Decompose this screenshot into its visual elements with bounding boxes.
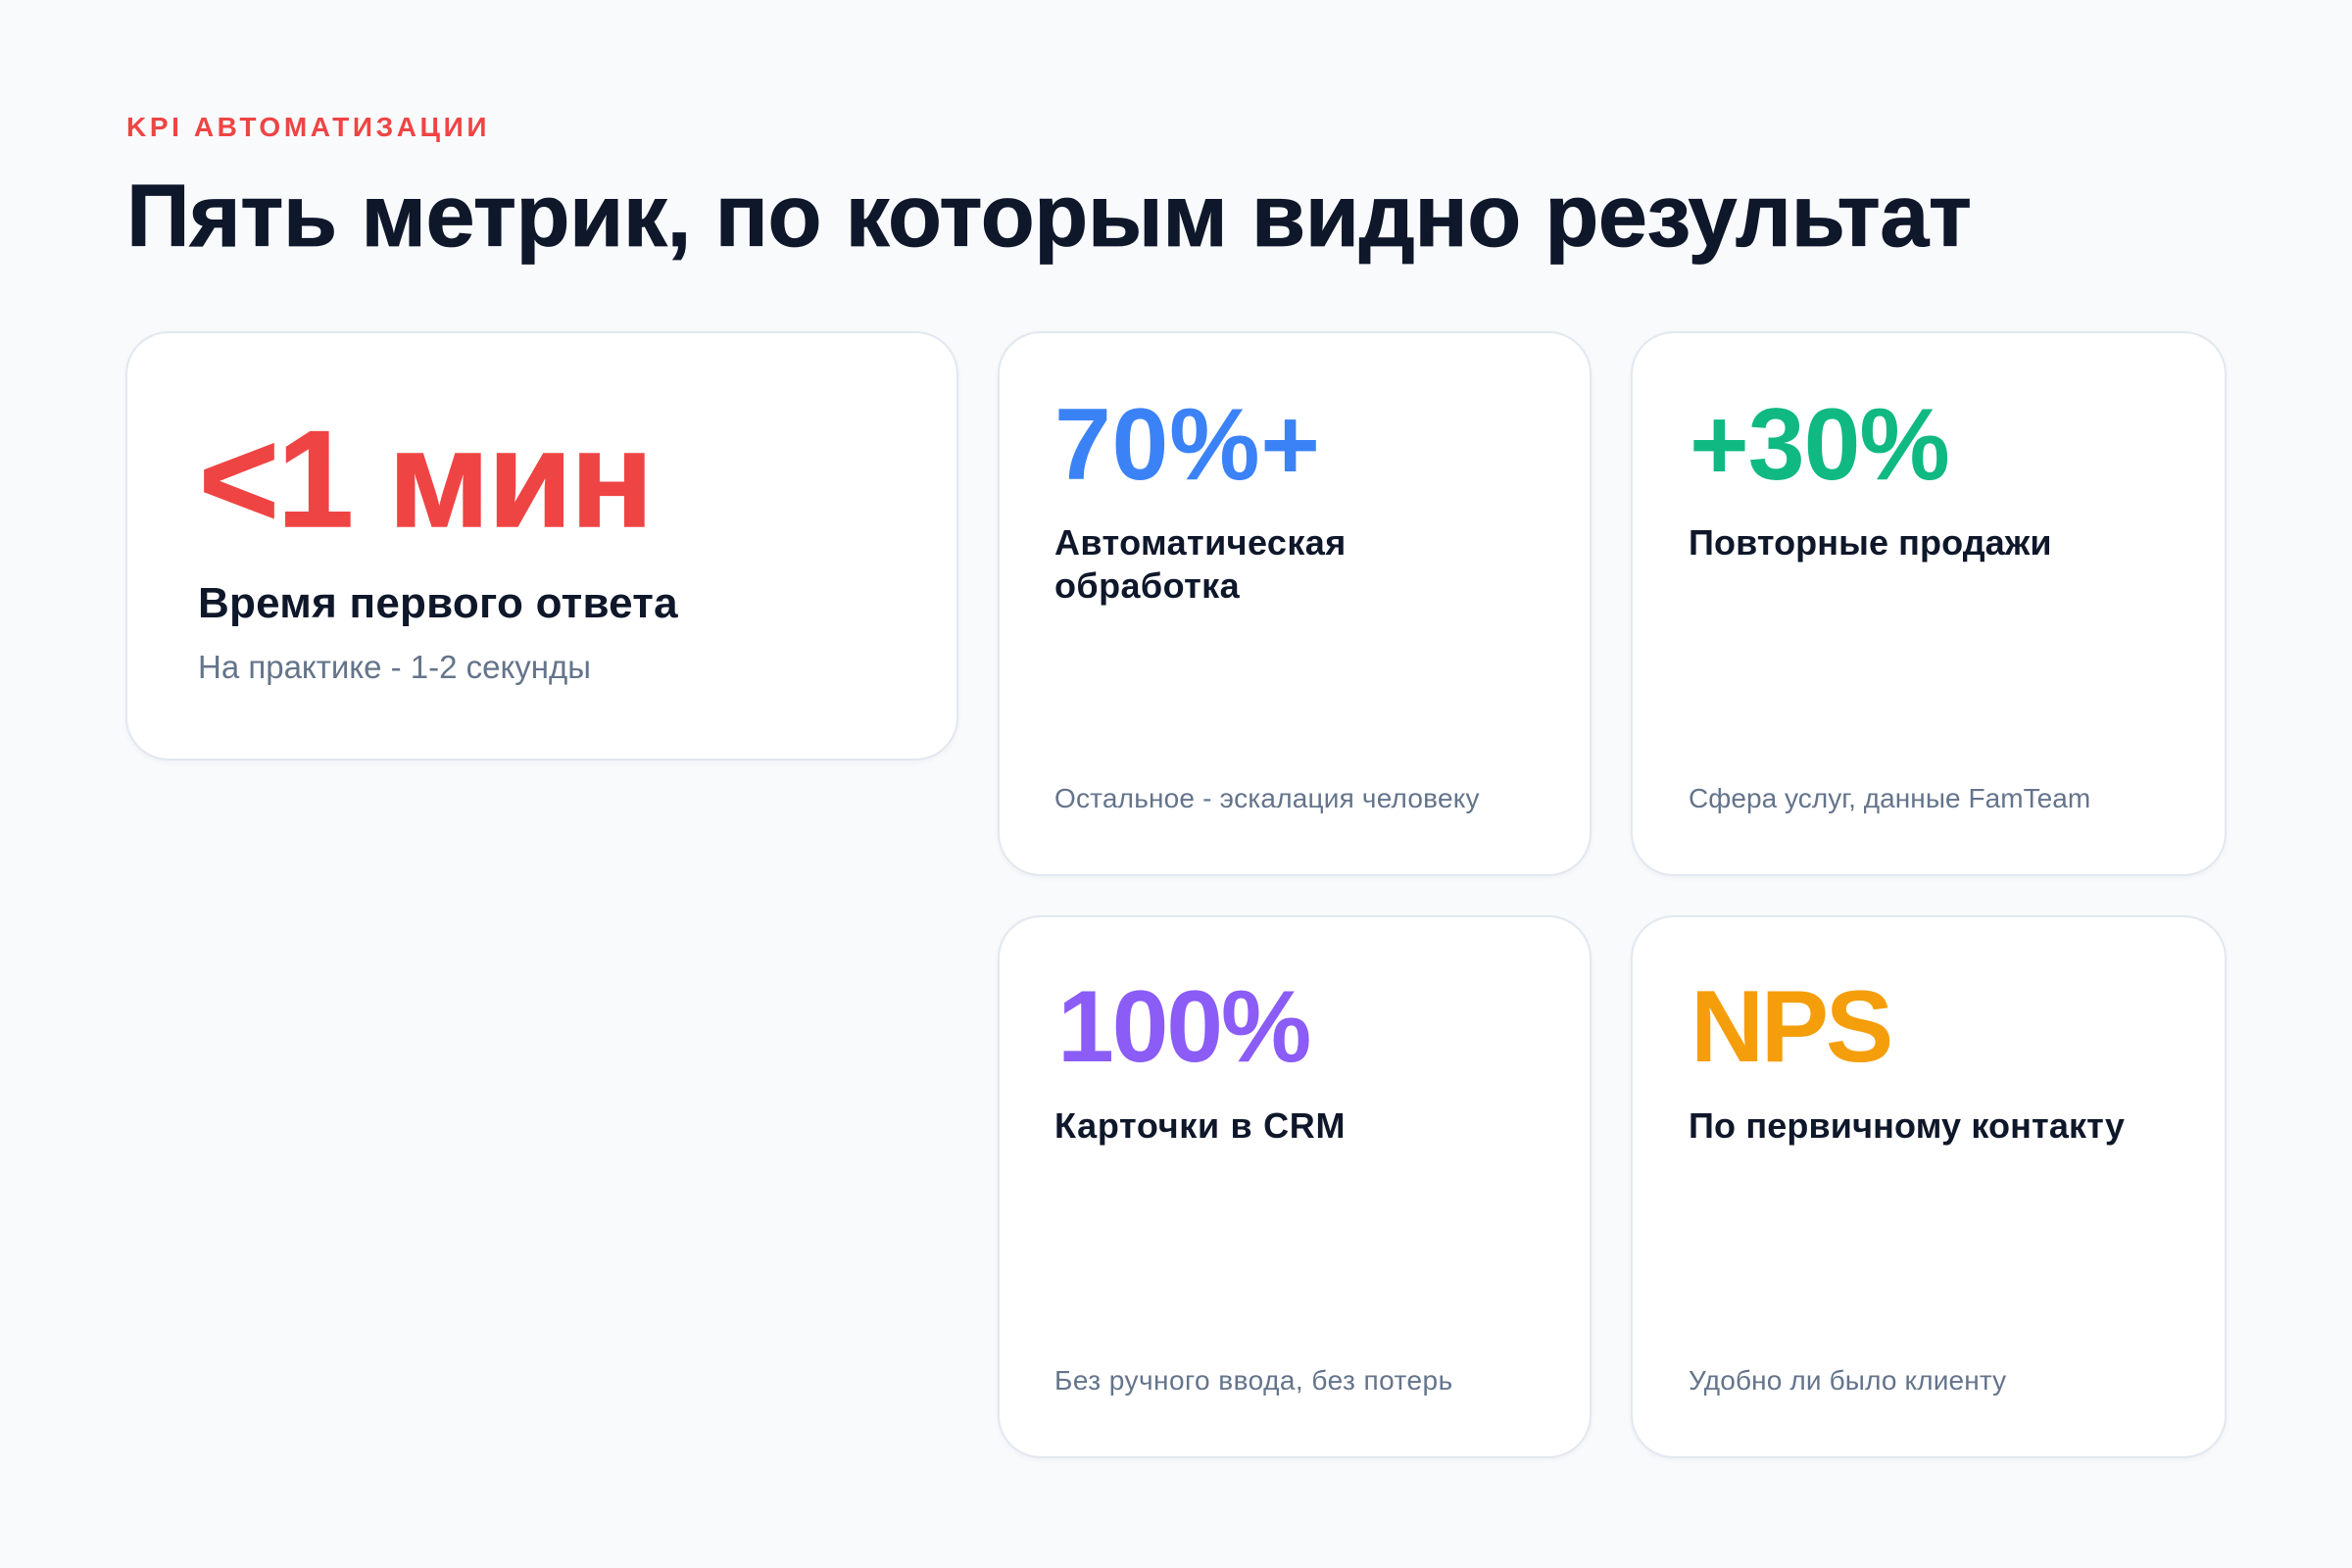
label: CRM cards: Карточки в CRM — [1054, 1105, 1346, 1146]
panel: CRM cards — [998, 915, 1592, 1458]
panel: repeat sales — [1631, 331, 2227, 876]
label: repeat sales: Повторные продажи — [1689, 522, 2052, 563]
note: no manual entry: Без ручного ввода, без потерь — [1054, 1365, 1453, 1396]
note: client convenience: Удобно ли было клиенту — [1689, 1365, 2006, 1396]
value: 70%+: 70%+ — [1054, 388, 1321, 502]
panel: first response time — [125, 331, 958, 760]
note: escalation: Остальное - эскалация человеку — [1054, 783, 1480, 813]
panel: automatic processing — [998, 331, 1592, 876]
label: first contact: По первичному контакту — [1689, 1105, 2125, 1146]
value: 100%: 100% — [1057, 970, 1309, 1084]
label: automatic processing: обработка — [1054, 565, 1240, 606]
label: automatic processing — [1054, 522, 1347, 606]
title: Пять метрик, по которым видно результат — [126, 168, 1971, 266]
value: NPS: NPS — [1690, 970, 1890, 1084]
note: first response: На практике - 1-2 секунды — [198, 649, 591, 685]
panel: NPS — [1631, 915, 2227, 1458]
label: first response: Время первого ответа — [198, 579, 678, 627]
eyebrow: KPI АВТОМАТИЗАЦИИ — [126, 112, 490, 142]
note: services data: Сфера услуг, данные FamTeam — [1689, 783, 2090, 813]
value: under 1 minute: <1 мин — [199, 402, 652, 556]
value: +30%: +30% — [1690, 388, 1949, 502]
label: automatic processing: Автоматическая — [1054, 522, 1347, 563]
